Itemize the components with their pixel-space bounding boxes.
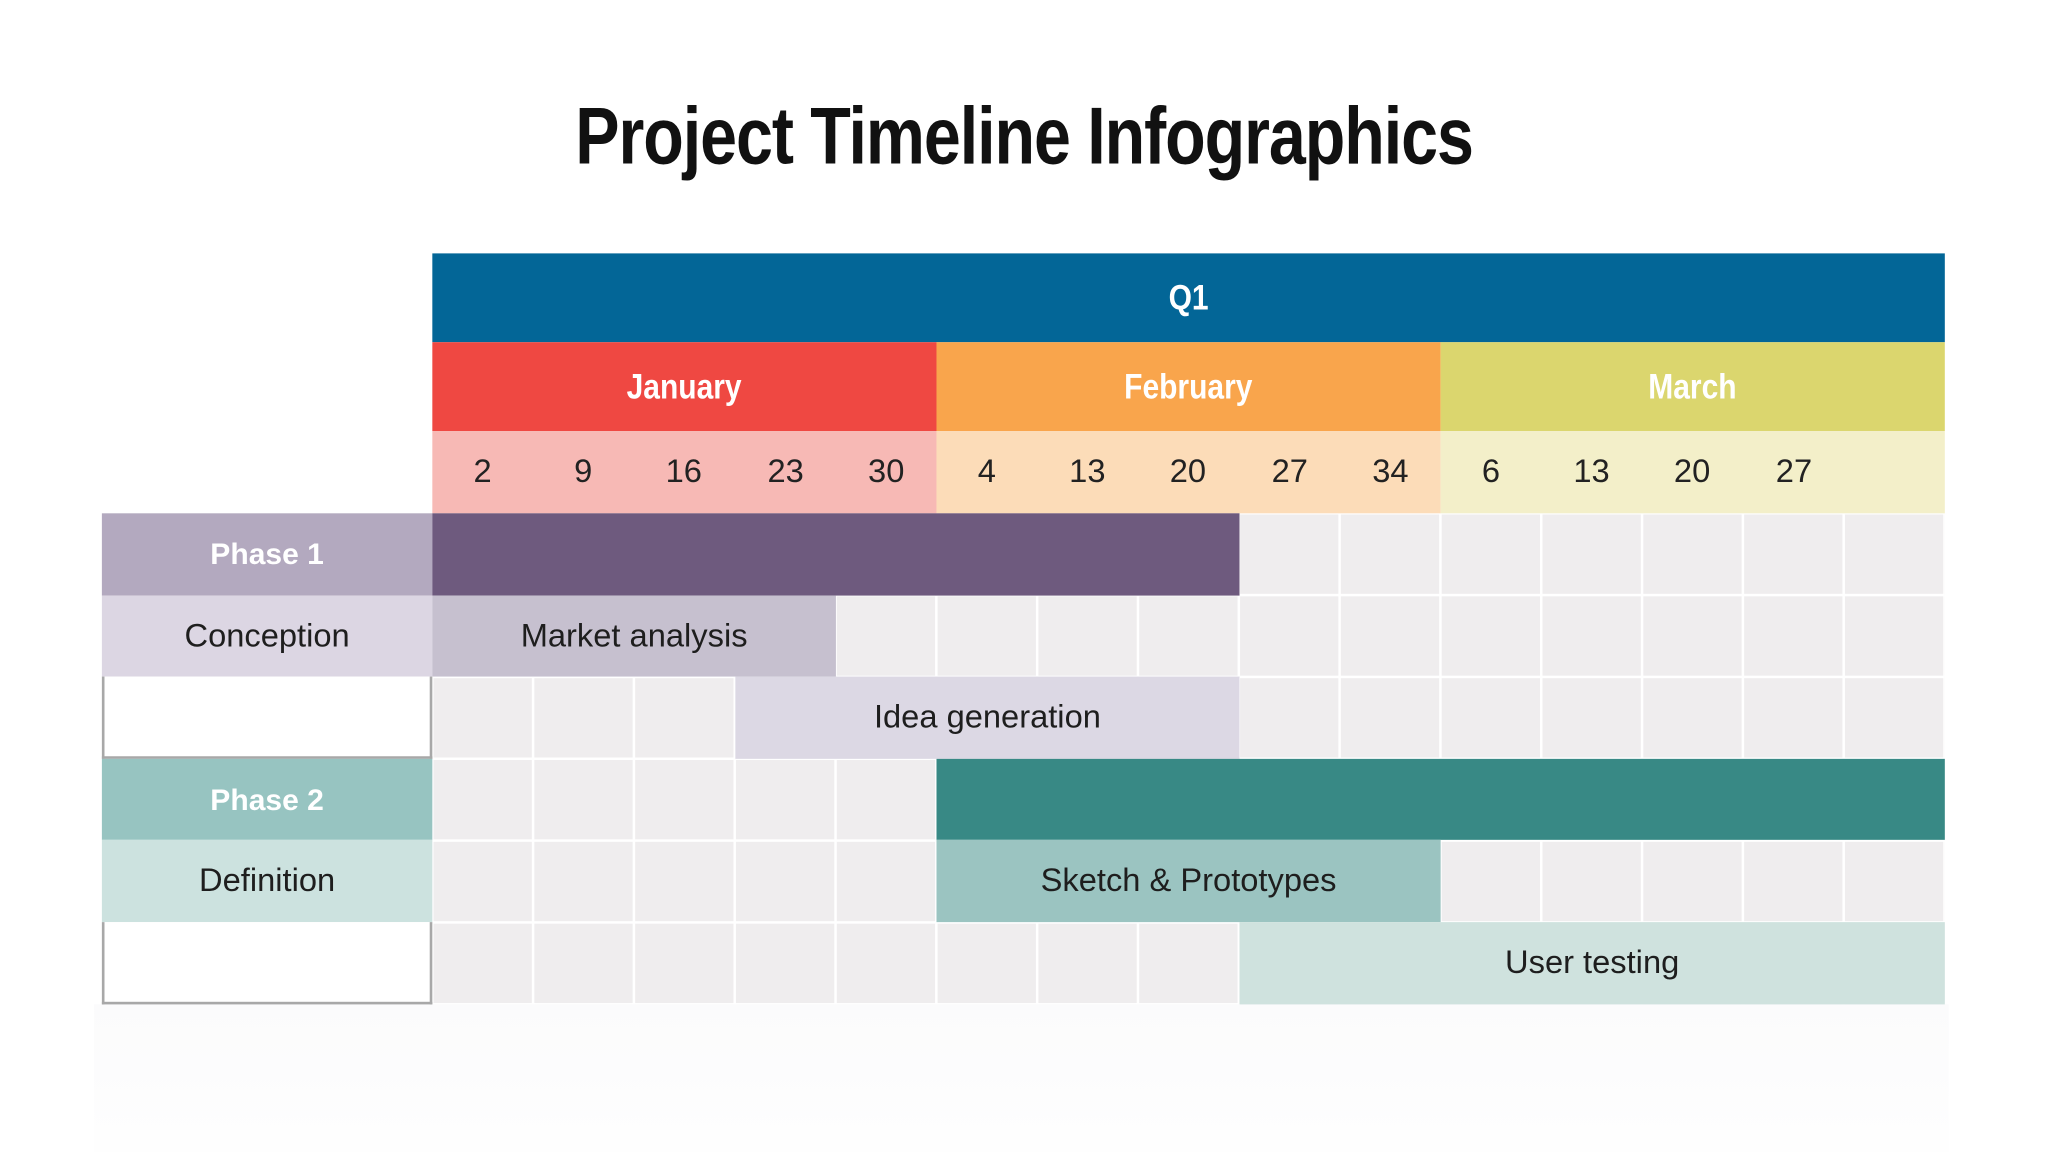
- weeks row: 16: [666, 453, 702, 490]
- header: March: [1441, 342, 1945, 431]
- title: Project Timeline Infographics: [575, 91, 1473, 181]
- weeks row: 13: [1069, 453, 1106, 490]
- label: Phase 1: [102, 513, 432, 596]
- weeks row: 27: [1272, 453, 1308, 490]
- label: Conception: [102, 596, 432, 677]
- weeks row: 23: [767, 453, 804, 490]
- bar: User testing: User testing: [1505, 944, 1679, 981]
- weeks row: 20: [1674, 453, 1710, 490]
- bar: Idea generation: Idea generation: [874, 699, 1101, 735]
- bar: Sketch & Prototypes: Sketch & Prototypes: [1041, 862, 1336, 899]
- weeks row: 13: [1573, 453, 1610, 490]
- bar: Market analysis: [432, 596, 836, 677]
- bar: Phase 2: [936, 759, 1945, 840]
- weeks row: 9: [574, 453, 592, 490]
- header: January: January: [627, 366, 742, 406]
- bar: Sketch & Prototypes: [936, 840, 1441, 922]
- grid background: [432, 513, 1945, 1004]
- label: Phase 2: Phase 2: [210, 782, 324, 816]
- header: February: [936, 342, 1441, 431]
- weeks row: [432, 431, 1945, 514]
- weeks row: 4: [978, 453, 996, 490]
- empty label box 1: [102, 677, 432, 759]
- weeks row: 30: [868, 453, 904, 490]
- header: March: March: [1649, 366, 1737, 406]
- weeks row: 6: [1482, 453, 1500, 490]
- weeks row: 20: [1170, 453, 1206, 490]
- header: Q1: [432, 253, 1945, 342]
- bottom shade: [94, 1004, 1949, 1152]
- label: Definition: Definition: [199, 862, 335, 899]
- label: Definition: [102, 840, 432, 922]
- bar: Market analysis: Market analysis: [521, 617, 748, 654]
- bar: Idea generation: [735, 677, 1240, 759]
- label: Phase 2: [102, 759, 432, 840]
- header: February: February: [1124, 366, 1253, 406]
- bar: Phase 1: [432, 513, 1240, 596]
- label: Phase 1: Phase 1: [210, 537, 324, 571]
- label: Conception: Conception: [184, 617, 350, 654]
- weeks row: 27: [1776, 453, 1812, 490]
- empty label box 2: [102, 922, 432, 1004]
- header: Q1: Q1: [1169, 278, 1209, 317]
- weeks row: 2: [474, 453, 492, 490]
- bar: User testing: [1240, 922, 1945, 1004]
- header: January: [432, 342, 936, 431]
- weeks row: 34: [1372, 453, 1409, 490]
